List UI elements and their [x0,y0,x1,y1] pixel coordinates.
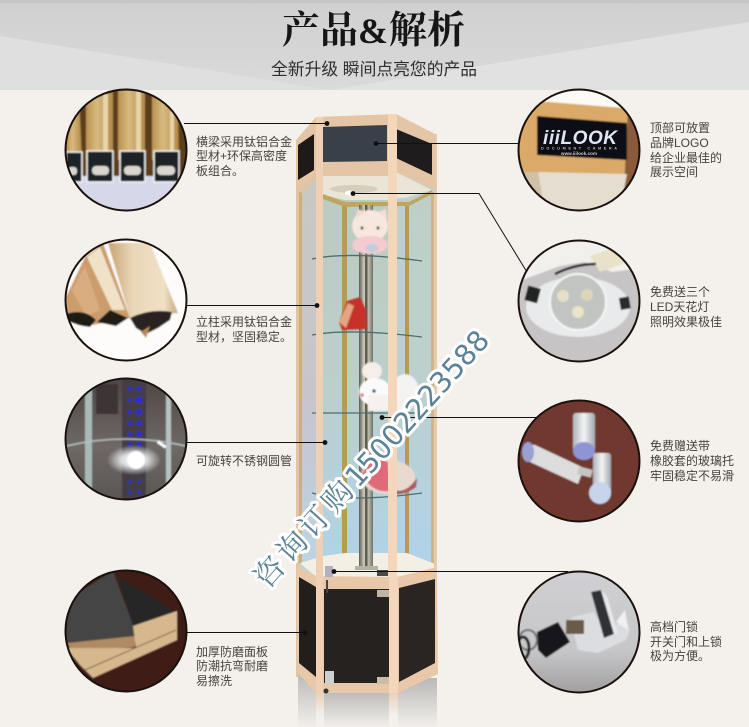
centre pole [355,205,378,570]
text: rotating tube: 可旋转不锈钢圆管 [196,453,292,468]
floor reflection [298,672,437,727]
text: logo space: 展示空间 [650,165,698,179]
text: LED lights: 免费送三个 [650,284,710,299]
toy: kitty [352,209,388,254]
watermark: phone order: 咨询订购15002223588 [247,323,497,595]
text: panel [196,644,268,688]
header band [0,0,749,90]
text: cross beam: 横梁采用钛铝合金 [196,134,292,149]
glass side panels [298,165,435,578]
photo circle: champagne column profiles [64,238,188,362]
text: door lock: 高档门锁 [650,619,698,634]
text: logo space: 给企业最佳的 [650,150,722,165]
text: logo space: 顶部可放置 [650,120,710,135]
photo circle: door lock and key [517,570,641,694]
photo circle: top logo panel [517,89,641,213]
text: door lock [650,619,722,663]
front posts and outer frame [296,114,437,692]
title: & [358,11,388,51]
product: hexagonal display cabinet [296,114,438,727]
photo circle: top logo panel: DOCUMENT CAMERA [541,146,617,150]
text: logo space [650,120,722,179]
text: panel: 易擦洗 [196,674,232,688]
text: glass supports: 牢固稳定不易滑 [650,468,734,483]
text: cross beam [196,134,292,178]
photo circle: LED ceiling lamp [517,239,641,363]
photo circle: top logo panel: www.iiilook.com [560,151,597,156]
text: LED lights: LED天花灯 [650,299,709,314]
text: column: 立柱采用钛铝合金 [196,314,292,329]
top cap with logo panels [296,114,436,190]
text: LED lights: 照明效果极佳 [650,314,722,329]
subtitle: 全新升级 瞬间点亮您的产品 [271,60,477,79]
text: glass supports: 免费赠送带 [650,438,710,453]
base cabinet [297,565,438,694]
title: 解析 [389,0,465,54]
text: glass supports [650,438,734,483]
text: glass supports: 橡胶套的玻璃托 [650,453,734,468]
text: cross beam: 型材+环保高密度 [196,148,287,163]
text: panel: 防潮抗弯耐磨 [196,658,268,673]
text: door lock: 开关门和上锁 [650,634,722,649]
toy: pink shoes [361,460,417,494]
photo circle: rotating stainless tube [64,378,188,502]
text: column: 型材，坚固稳定。 [196,329,292,344]
glass shelves [312,255,422,498]
title: 产品 [282,0,358,54]
photo circle: gold beam profiles [64,88,188,214]
toy: white rabbit [359,362,419,411]
photo circle: thick wear-resistant board [64,569,188,693]
text: column [196,314,292,344]
text: logo space: 品牌LOGO [650,136,709,150]
text: cross beam: 板组合。 [196,163,244,178]
photo circle: top logo panel: iiiLOOK [543,128,618,149]
photo circle: glass shelf supports [517,399,641,523]
text: panel: 加厚防磨面板 [196,644,268,659]
leader lines and dots [184,121,568,635]
text: door lock: 极为方便。 [650,648,710,663]
text: LED lights [650,284,722,329]
toy: red shoe [339,297,367,330]
